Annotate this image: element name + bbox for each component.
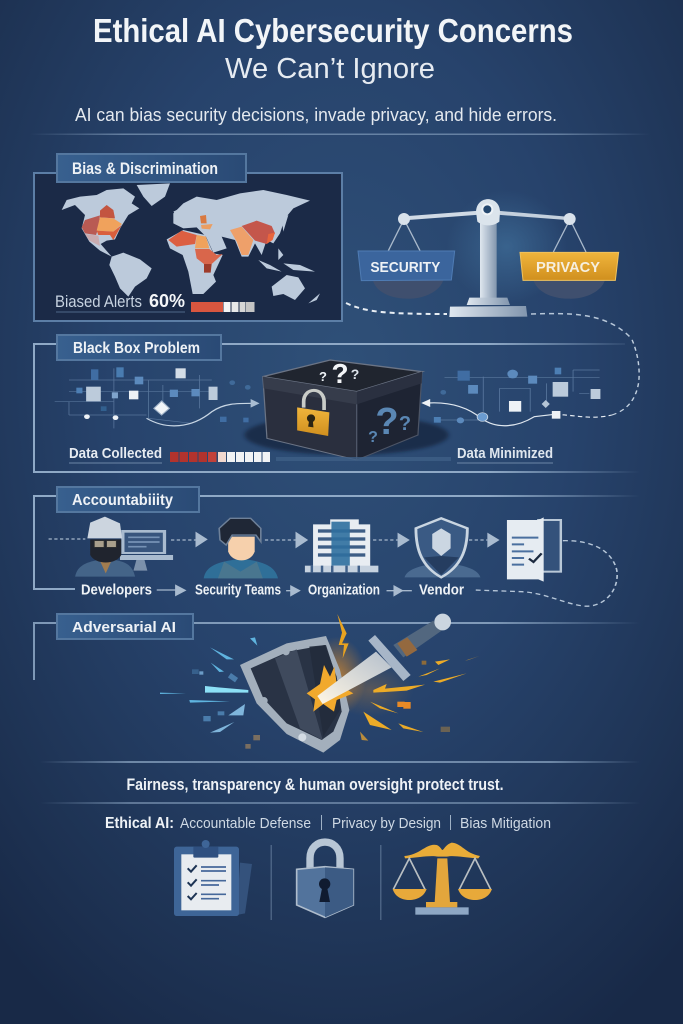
icon: organization building [305, 519, 378, 572]
security label [358, 251, 455, 281]
panel: accountability [34, 487, 640, 606]
data minimized label: Data Minimized [457, 445, 553, 462]
title: Ethical AI Cybersecurity Concerns [93, 12, 573, 49]
accountability labels: Vendor [419, 582, 464, 598]
biased alerts stat [55, 291, 254, 312]
icon: locked black box [244, 358, 449, 460]
icon: locked black box: ? [399, 413, 411, 435]
privacy label: PRIVACY [536, 259, 600, 276]
ethical ai pillars: Privacy by Design [332, 815, 441, 832]
icon: locked black box: ? [331, 358, 349, 389]
biased alerts stat: Biased Alerts [55, 292, 142, 311]
privacy label [520, 252, 619, 280]
ethical ai pillars: Accountable Defense [180, 815, 311, 832]
title [93, 12, 573, 85]
dashed connector top [346, 303, 447, 314]
icon: security team member [204, 518, 278, 578]
accountability labels: Organization [308, 582, 380, 598]
tab: adversarial ai [57, 614, 193, 639]
ethical ai pillars [105, 815, 551, 832]
icon: padlock [297, 842, 353, 917]
icon: locked black box: ? [375, 401, 399, 443]
icon: gold scales [393, 843, 492, 915]
icon: document [507, 517, 561, 582]
icon: sword striking shield [160, 614, 479, 753]
ethical ai pillars: Ethical AI: [105, 815, 174, 832]
ethical ai pillars: Bias Mitigation [460, 815, 551, 832]
trust statement: Fairness, transparency & human oversight protect trust. [126, 776, 504, 794]
title: We Can’t Ignore [225, 53, 435, 85]
tab: black box problem: Black Box Problem [73, 340, 200, 357]
icon: balance scale security vs privacy [358, 190, 619, 317]
panel: bias and discrimination [34, 154, 342, 321]
icon: vendor shield [404, 518, 480, 577]
data collected meter: Data Collected [69, 445, 162, 462]
icon: locked black box: ? [319, 369, 327, 384]
accountability labels [81, 582, 464, 598]
data network left [55, 367, 260, 428]
biased alerts stat: 60% [149, 291, 185, 311]
subtitle: AI can bias security decisions, invade privacy, and hide errors. [75, 105, 557, 125]
bottom icons [174, 840, 492, 920]
panel: black box problem [34, 335, 640, 472]
icon: developer [75, 517, 173, 577]
tab: bias and discrimination [57, 154, 246, 182]
accountability labels: Security Teams [195, 582, 281, 598]
tab: adversarial ai: Adversarial AI [72, 619, 176, 636]
data network right [421, 337, 639, 426]
accountability flow [49, 517, 617, 606]
tab: accountability [57, 487, 199, 512]
icon: locked black box: ? [351, 366, 359, 382]
world map [62, 183, 320, 303]
icon: clipboard checklist [174, 840, 252, 916]
data collected meter [69, 445, 451, 464]
tab: bias and discrimination: Bias & Discrimination [72, 160, 218, 178]
tab: accountability: Accountabiiity [72, 492, 173, 509]
security label: SECURITY [370, 259, 440, 276]
panel: adversarial ai [34, 614, 640, 753]
accountability labels: Developers [81, 582, 152, 598]
icon: locked black box: ? [368, 429, 378, 446]
tab: black box problem [57, 335, 221, 360]
